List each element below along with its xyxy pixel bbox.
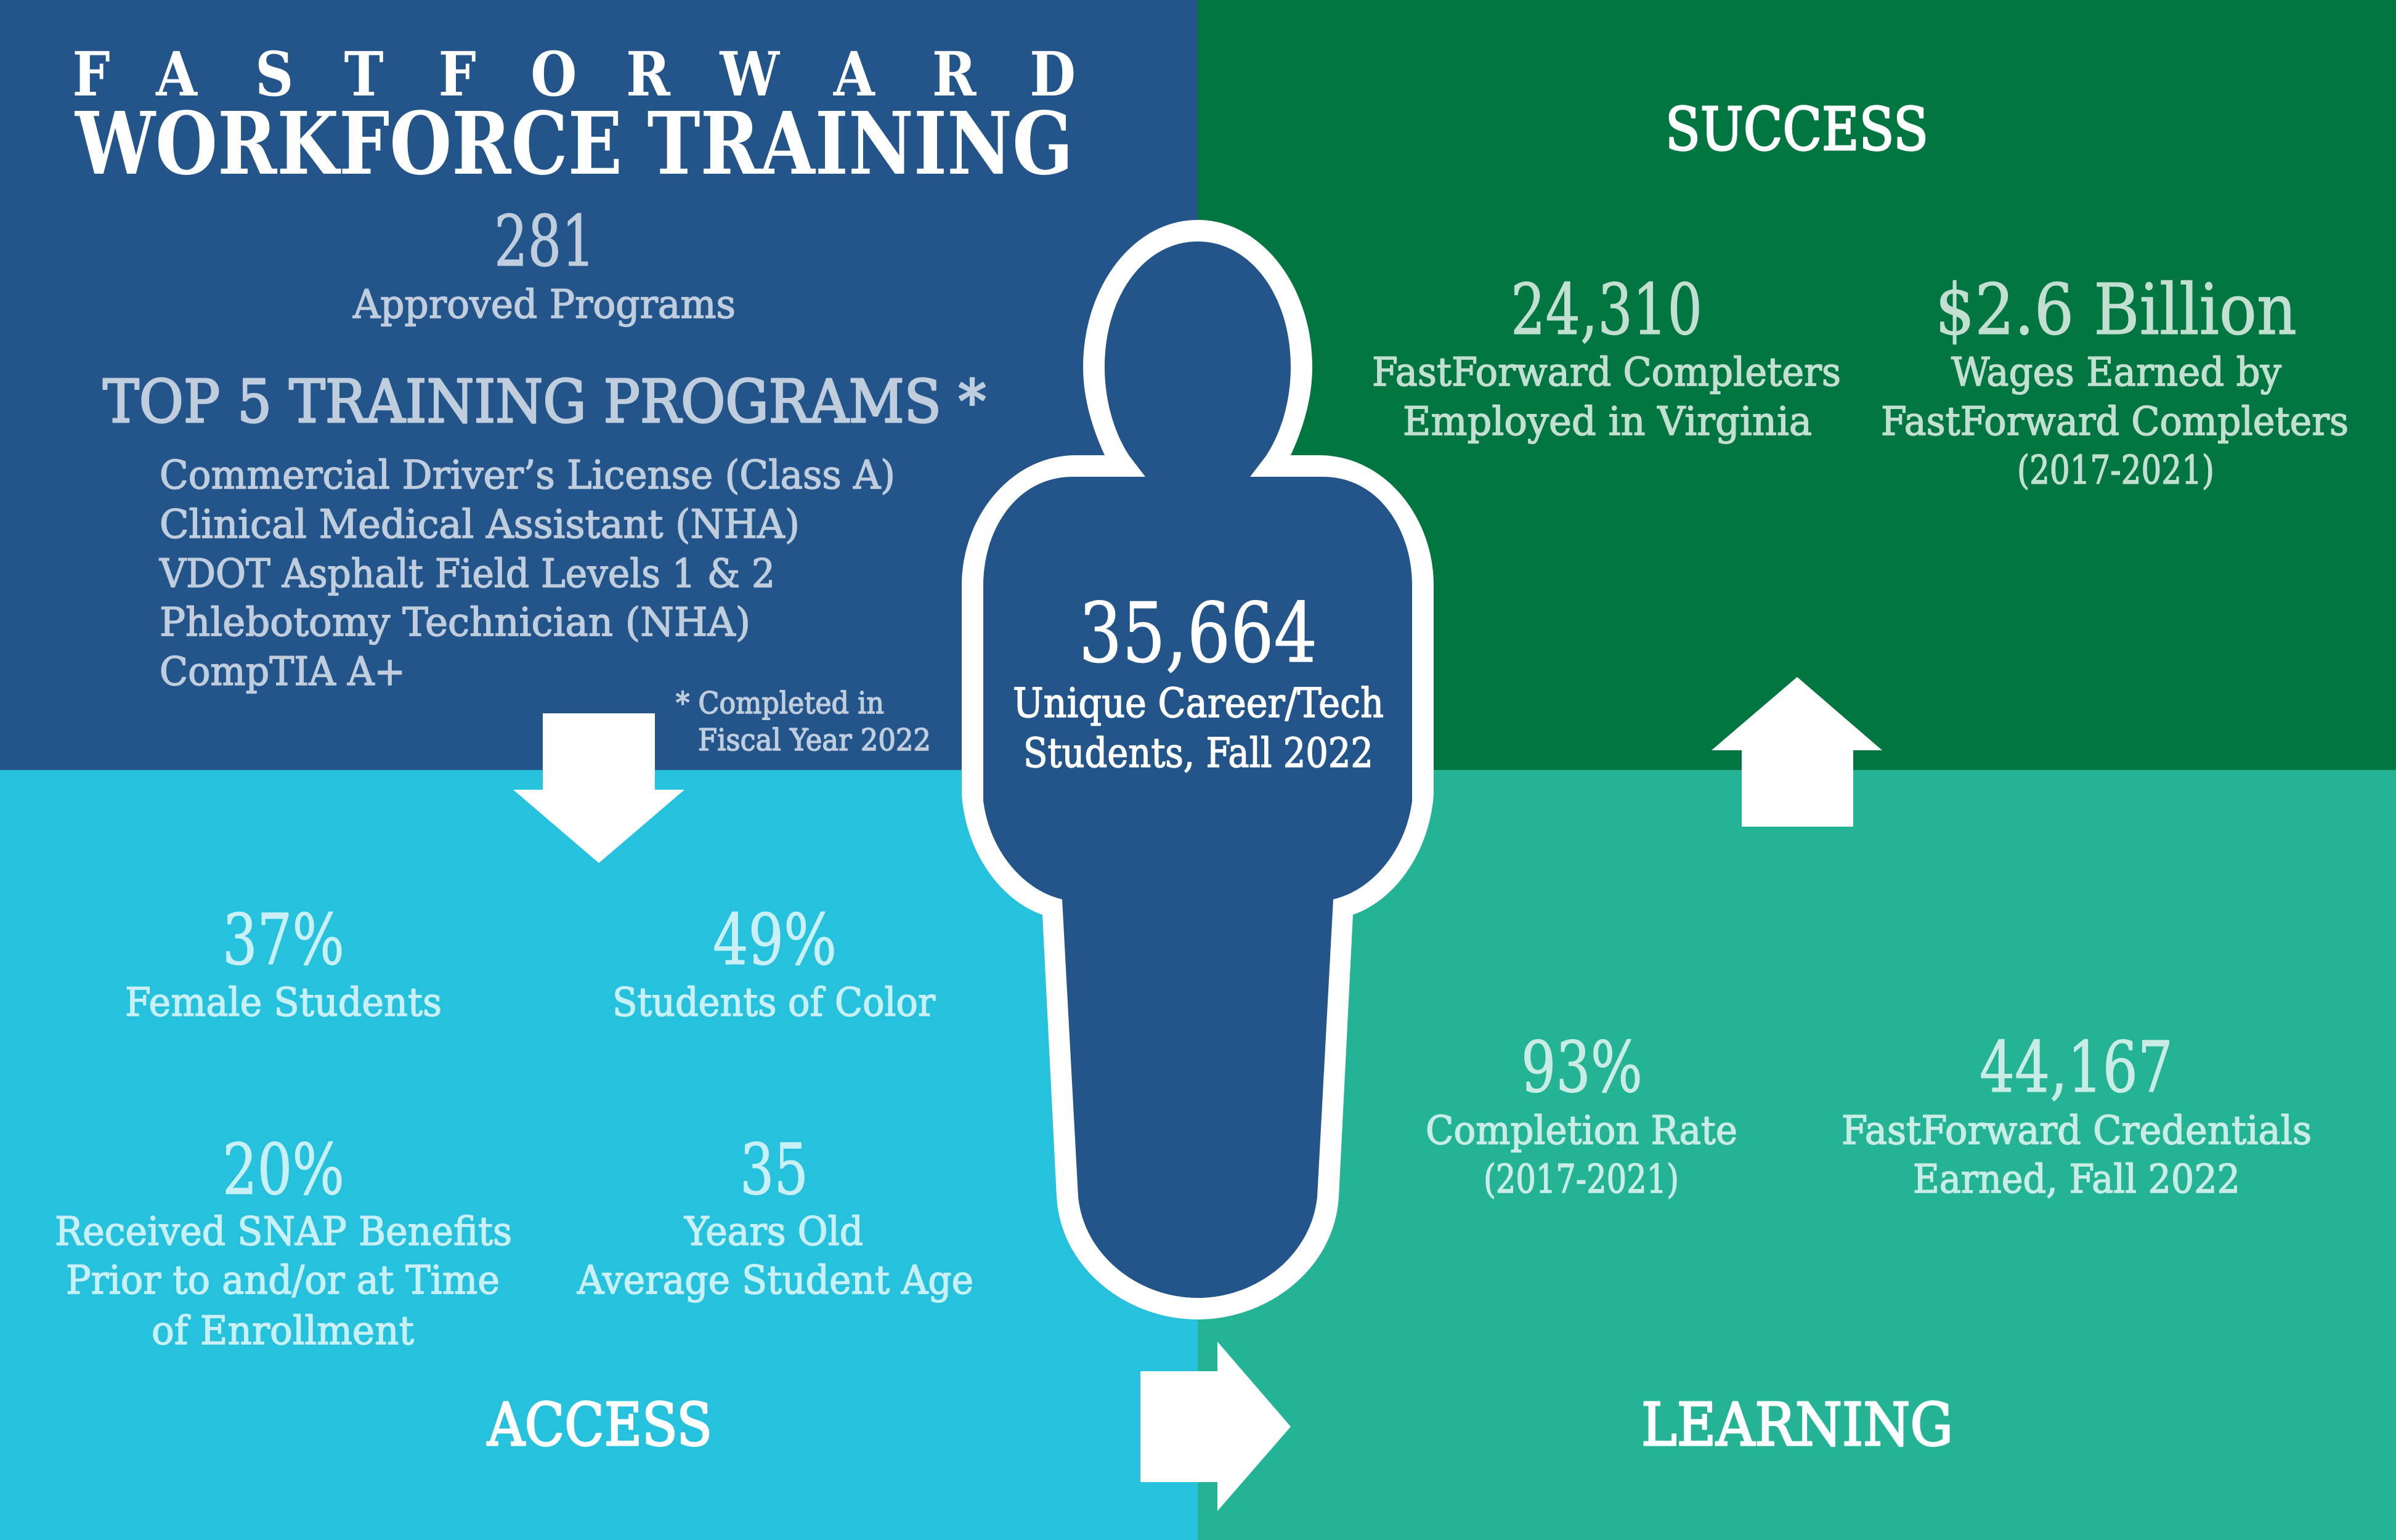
stat: students of color: Students of Color [612, 980, 935, 1026]
stat: completers employed: Employed in Virginia [1403, 399, 1812, 445]
stat: average age: Years Old [684, 1209, 863, 1255]
stat: wages earned: FastForward Completers [1881, 399, 2349, 445]
stat: credentials earned [1842, 1026, 2312, 1202]
title [72, 39, 1076, 195]
heading: top 5 training programs: TOP 5 TRAINING PROGRAMS * [103, 367, 986, 436]
arrow: up from learning to success [1712, 677, 1882, 827]
stat: completers employed: 24,310 [1511, 269, 1702, 351]
stat: approved programs: Approved Programs [352, 282, 736, 328]
stat: completion rate: 93% [1521, 1026, 1643, 1108]
stat: students of color [612, 899, 935, 1026]
stat: female students [125, 899, 442, 1026]
stat: average age: 35 [740, 1129, 808, 1210]
stat: completers employed [1372, 269, 1841, 445]
panel: access [0, 770, 1198, 1540]
stat: unique students [1013, 585, 1384, 777]
stat: female students: 37% [222, 899, 344, 981]
stat: female students: Female Students [125, 980, 442, 1026]
list: top 5 programs [159, 453, 895, 695]
arrow: down from overview to access [513, 713, 684, 863]
list: top 5 programs: Phlebotomy Technician (NHA) [160, 600, 750, 646]
stat: completers employed: FastForward Completers [1372, 350, 1841, 395]
footnote: * Completed in [676, 686, 884, 721]
stat: unique students: 35,664 [1079, 585, 1317, 681]
title: WORKFORCE TRAINING [74, 94, 1073, 195]
stat: completion rate: Completion Rate [1426, 1108, 1737, 1154]
heading: success: SUCCESS [1665, 95, 1928, 164]
arrow: right from access to learning [1140, 1342, 1291, 1511]
stat: credentials earned: 44,167 [1980, 1026, 2173, 1108]
icon: student silhouette [962, 220, 1434, 1319]
stat: completion rate [1426, 1026, 1737, 1202]
footnote [676, 686, 931, 758]
stat: students of color: 49% [713, 899, 837, 981]
panel: learning [1198, 770, 2396, 1540]
panel: success [1198, 0, 2396, 770]
panel: fastforward overview [0, 0, 1198, 770]
stat: wages earned: Wages Earned by [1951, 350, 2281, 395]
stat: wages earned: (2017-2021) [2017, 448, 2214, 493]
stat: wages earned: $2.6 Billion [1935, 269, 2297, 351]
stat: credentials earned: Earned, Fall 2022 [1913, 1157, 2240, 1202]
stat: SNAP benefits [55, 1129, 512, 1354]
stat: approved programs: 281 [494, 200, 595, 282]
stat: SNAP benefits: Received SNAP Benefits [55, 1209, 512, 1255]
stat: SNAP benefits: of Enrollment [152, 1308, 414, 1354]
footnote: Fiscal Year 2022 [698, 723, 931, 758]
list: top 5 programs: VDOT Asphalt Field Levels 1 & 2 [159, 551, 775, 597]
stat: wages earned [1881, 269, 2349, 493]
stat: average age [577, 1129, 973, 1303]
title: FASTFORWARD [72, 39, 1076, 110]
stat: credentials earned: FastForward Credentials [1842, 1108, 2312, 1154]
heading: learning: LEARNING [1641, 1390, 1953, 1459]
stat: completion rate: (2017-2021) [1484, 1157, 1679, 1202]
stat: SNAP benefits: Prior to and/or at Time [66, 1258, 500, 1303]
list: top 5 programs: Clinical Medical Assistant (NHA) [160, 502, 800, 548]
stat: unique students: Unique Career/Tech [1013, 679, 1384, 727]
stat: approved programs [352, 200, 736, 328]
heading: access: ACCESS [487, 1390, 712, 1459]
stat: SNAP benefits: 20% [222, 1129, 344, 1210]
stat: average age: Average Student Age [577, 1258, 973, 1303]
stat: unique students: Students, Fall 2022 [1023, 729, 1373, 777]
list: top 5 programs: Commercial Driver’s License (Class A) [160, 453, 895, 498]
list: top 5 programs: CompTIA A+ [160, 649, 405, 695]
